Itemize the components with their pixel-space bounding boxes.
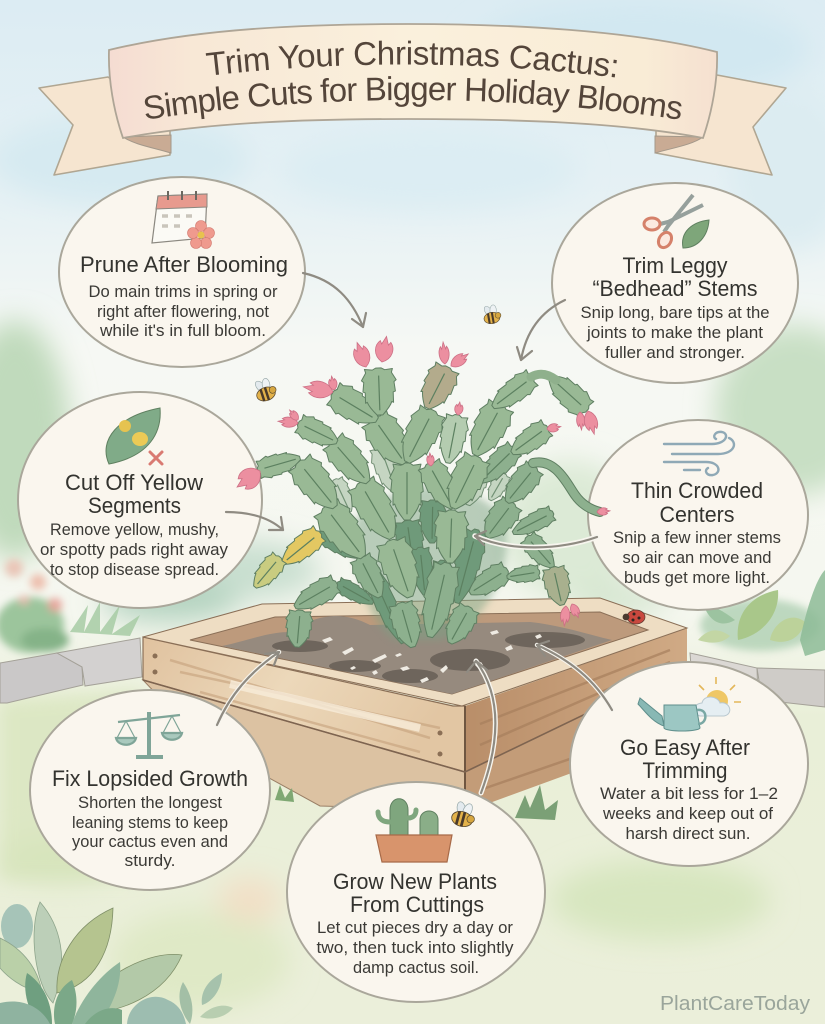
yellow diseased pads: [275, 523, 328, 573]
body text: damp cactus soil.: [353, 959, 479, 977]
bed top rim: [143, 598, 687, 706]
heading: Centers: [660, 502, 734, 527]
garden stones: [0, 638, 825, 707]
title text: Trim Your Christmas Cactus:: [206, 40, 617, 78]
body text: [72, 794, 228, 870]
heading: Thin Crowded: [631, 478, 763, 503]
body text: [580, 304, 770, 362]
panel: fix lopsided growth: [30, 690, 270, 890]
bed inner back wall: [190, 598, 648, 694]
heading: Segments: [88, 493, 181, 518]
arrow: yellow segments: [226, 512, 283, 530]
body text: so air can move and: [622, 549, 772, 567]
panel: prune after blooming: [59, 177, 305, 367]
body text: Water a bit less for 1–2: [600, 785, 778, 803]
body text: sturdy.: [124, 852, 176, 870]
heading: [592, 253, 758, 301]
title ribbon banner: [38, 23, 787, 176]
heading: From Cuttings: [350, 892, 484, 917]
body text: right after flowering, not: [97, 303, 269, 321]
overlapping plant parts: left bloom: [231, 447, 303, 495]
ribbon left tail: [39, 77, 170, 175]
foliage: bottom-left leaves: [0, 902, 233, 1024]
mid green pads: [283, 439, 561, 651]
arrow: cuttings: [467, 661, 495, 793]
body text: [316, 919, 514, 977]
bed lower boards: [143, 680, 465, 810]
ribbon right tail: [656, 75, 786, 175]
body text: leaning stems to keep: [72, 814, 228, 832]
body text: two, then tuck into slightly: [316, 939, 514, 957]
lawn band near bed: [0, 690, 140, 880]
ribbon folds: [123, 135, 703, 153]
body text: Snip a few inner stems: [613, 529, 781, 547]
heading: “Bedhead” Stems: [592, 276, 758, 301]
body text: fuller and stronger.: [605, 344, 745, 362]
grass tuft bed left: [275, 785, 294, 802]
arrow: lopsided growth: [217, 652, 279, 725]
body text: while it's in full bloom.: [99, 322, 266, 340]
heading: Grow New Plants: [333, 869, 497, 894]
body text: buds get more light.: [624, 569, 770, 587]
icon: ladybug: [623, 610, 645, 624]
body text: Let cut pieces dry a day or: [317, 919, 514, 937]
icon: watering can with sun and cloud: [638, 677, 741, 731]
soil: [222, 616, 612, 694]
plant shadow mass: [354, 486, 507, 640]
icon: bee left: [252, 375, 279, 403]
body text: [40, 521, 229, 579]
body text: Snip long, bare tips at the: [580, 304, 770, 322]
heading: Trimming: [642, 758, 728, 783]
heading: [620, 735, 750, 783]
body text: weeks and keep out of: [602, 805, 773, 823]
faded background pads: [326, 441, 513, 516]
panel: go easy after trimming: [570, 662, 808, 866]
dark rear pads: [315, 500, 490, 648]
panel: trim leggy stems: [552, 183, 798, 383]
arrow: go easy: [537, 641, 612, 710]
arrow: crowded centers: [475, 531, 597, 547]
icon: yellow leaf with x: [106, 408, 162, 464]
body text: Remove yellow, mushy,: [50, 521, 219, 539]
watermark: PlantCareToday: [660, 993, 810, 1015]
arching stem joint: [531, 374, 556, 380]
body text: Shorten the longest: [78, 794, 222, 812]
heading: Cut Off Yellow: [65, 470, 203, 495]
bed right face: [465, 628, 687, 772]
pink blooms and buds: [278, 335, 600, 626]
body text: or spotty pads right away: [40, 541, 229, 559]
arrow: prune to plant: [303, 273, 366, 327]
christmas cactus plant: [246, 335, 600, 651]
panel: thin crowded centers: [588, 420, 808, 610]
overlapping plant parts: wilting right stem: [533, 462, 610, 516]
body text: [600, 785, 778, 843]
body text: harsh direct sun.: [626, 825, 750, 843]
icon: bee right: [482, 303, 502, 325]
panel: grow new plants from cuttings: [287, 782, 545, 1002]
ribbon main band: [109, 24, 717, 138]
icon: calendar with flower: [152, 191, 214, 248]
grass tuft bed right: [515, 785, 558, 820]
body text: [613, 529, 781, 587]
icon: potted cuttings and bee: [376, 799, 478, 862]
heading: Go Easy After: [620, 735, 750, 760]
bed front face: [143, 637, 465, 772]
heading: [631, 478, 763, 527]
heading: Fix Lopsided Growth: [52, 766, 248, 791]
raised wooden bed: [143, 598, 687, 812]
body text: to stop disease spread.: [50, 561, 219, 579]
foliage: left shrub and flowers: [0, 559, 140, 653]
heading: [333, 869, 497, 917]
body text: Do main trims in spring or: [88, 283, 278, 301]
body text: joints to make the plant: [586, 324, 763, 342]
foliage: right shrub: [698, 570, 825, 656]
panel: cut off yellow segments: [18, 392, 262, 608]
icon: wind: [664, 432, 734, 475]
title text: [144, 40, 682, 120]
light and tinted pads: [435, 412, 471, 466]
title text: Simple Cuts for Bigger Holiday Blooms: [144, 76, 682, 120]
heading: Prune After Blooming: [80, 252, 288, 277]
icon: balance scales: [116, 712, 182, 757]
body text: [88, 283, 278, 340]
icon: scissors and leaf: [644, 195, 709, 250]
heading: [65, 470, 203, 518]
heading: Trim Leggy: [622, 253, 728, 278]
body text: your cactus even and: [72, 833, 228, 851]
front pads: [285, 367, 596, 603]
arrow: leggy stems: [517, 300, 565, 360]
